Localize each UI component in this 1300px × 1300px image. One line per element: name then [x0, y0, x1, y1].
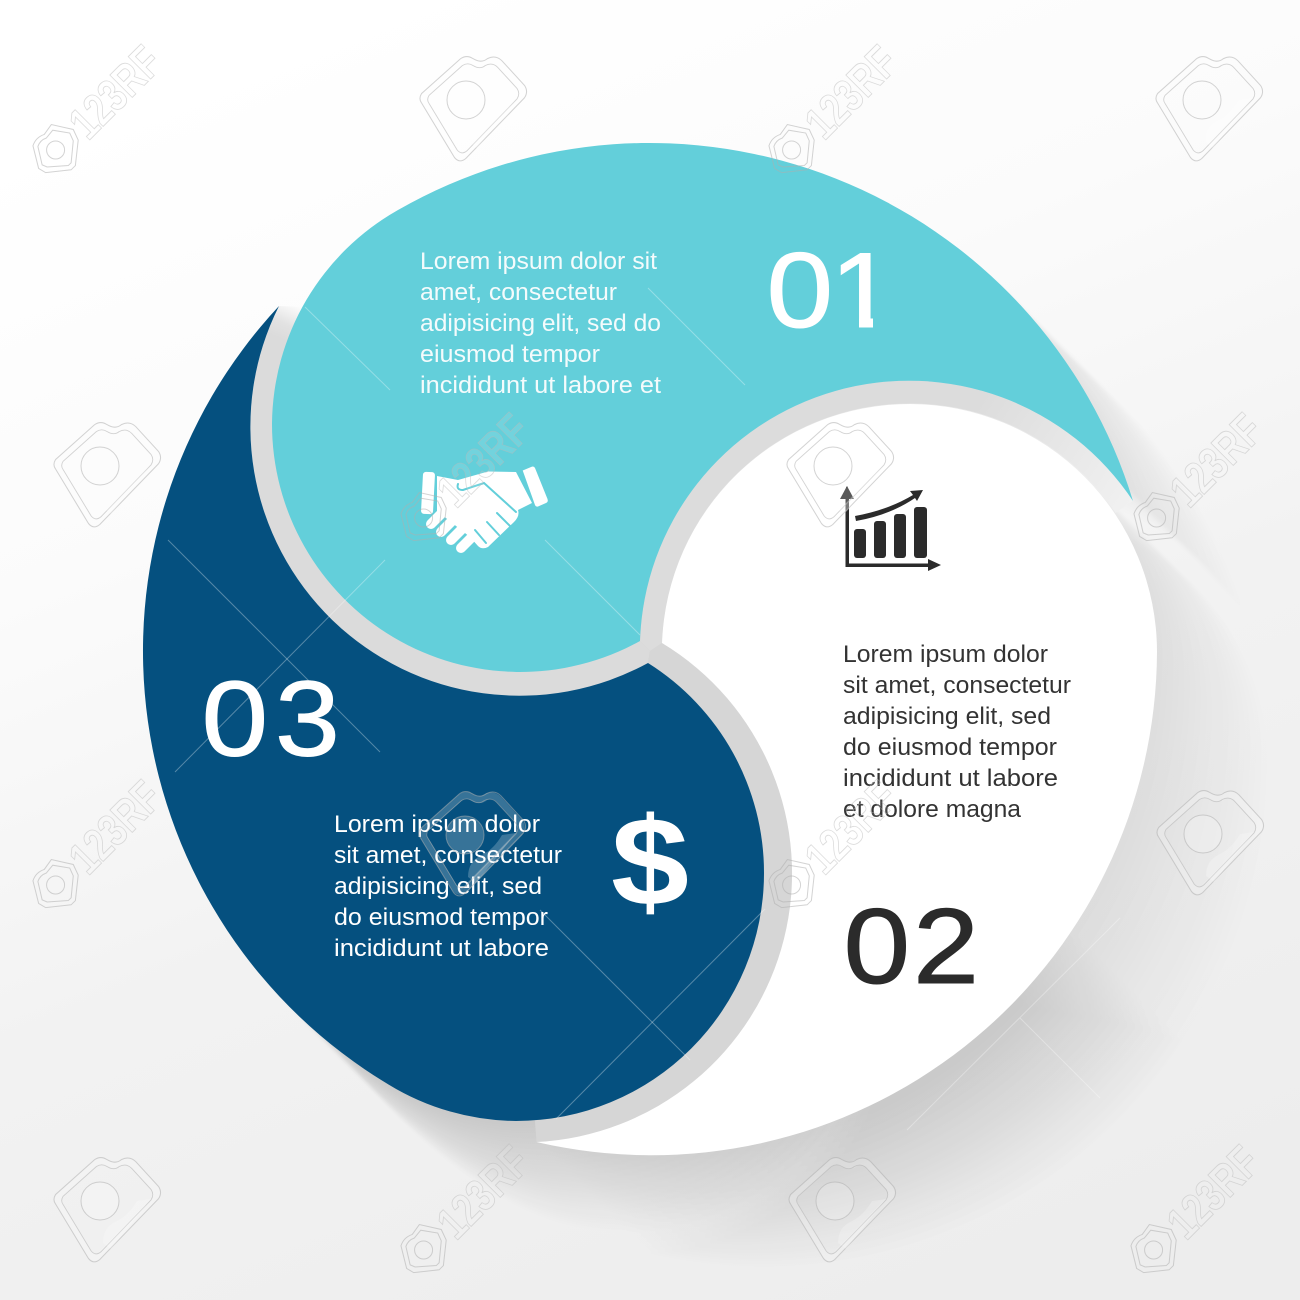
watermark logos: 123RF [58, 35, 172, 149]
icon: dollar sign: $ [611, 791, 689, 932]
text block: segment 03: incididunt ut labore [334, 935, 549, 962]
heading: number 01: 0 [766, 231, 833, 351]
heading: number 03 [202, 659, 340, 779]
text block: segment 01: eiusmod tempor [420, 341, 600, 368]
watermark logos: 123RF [58, 770, 172, 884]
gray separator ring around blue segment [535, 643, 792, 1142]
text block: segment 03: sit amet, consectetur [334, 842, 562, 869]
text block: segment 03: do eiusmod tempor [334, 904, 548, 931]
watermark logos: 123RF [794, 35, 908, 149]
panel: segment 02 white [536, 404, 1157, 1155]
icon: bar chart [840, 486, 941, 571]
text block: segment 02: adipisicing elit, sed [843, 703, 1051, 730]
text block: segment 03: adipisicing elit, sed [334, 873, 542, 900]
watermark logos: 123RF [426, 1135, 540, 1249]
text block: segment 02: Lorem ipsum dolor [843, 641, 1048, 668]
text block: segment 02: sit amet, consectetur [843, 672, 1071, 699]
panel: segment 03 blue [143, 306, 764, 1121]
panel: segment 01 teal [272, 143, 1133, 672]
text block: segment 01: amet, consectetur [420, 279, 617, 306]
text block: segment 02 [843, 641, 1071, 823]
heading: number 03: 0 [202, 659, 268, 779]
text block: segment 02: et dolore magna [843, 796, 1022, 823]
watermark logos: 123RF [1159, 403, 1273, 517]
text block: segment 03: Lorem ipsum dolor [334, 811, 540, 838]
heading: number 02 [844, 886, 979, 1007]
text block: segment 02: do eiusmod tempor [843, 734, 1057, 761]
heading: number 03: 3 [275, 659, 340, 778]
text block: segment 03 [334, 811, 562, 962]
icon: handshake [421, 467, 548, 548]
gray separator ring around white segment [640, 381, 1133, 651]
watermark logos: 123RF [1156, 1135, 1270, 1249]
text block: segment 01: Lorem ipsum dolor sit [420, 248, 657, 275]
heading: number 02: 0 [844, 887, 910, 1007]
text block: segment 02: incididunt ut labore [843, 765, 1058, 792]
heading: number 01: 1 [830, 230, 895, 350]
heading: number 01 [770, 252, 873, 328]
gray separator ring around teal segment [250, 306, 650, 696]
watermark logos: 123RF [794, 770, 908, 884]
heading: number 02: 2 [913, 886, 979, 1006]
watermark logos: 123RF [426, 403, 540, 517]
text block: segment 01 [420, 248, 661, 399]
text block: segment 01: adipisicing elit, sed do [420, 310, 661, 337]
text block: segment 01: incididunt ut labore et [420, 372, 661, 399]
long diagonal shadows [148, 148, 1267, 1265]
